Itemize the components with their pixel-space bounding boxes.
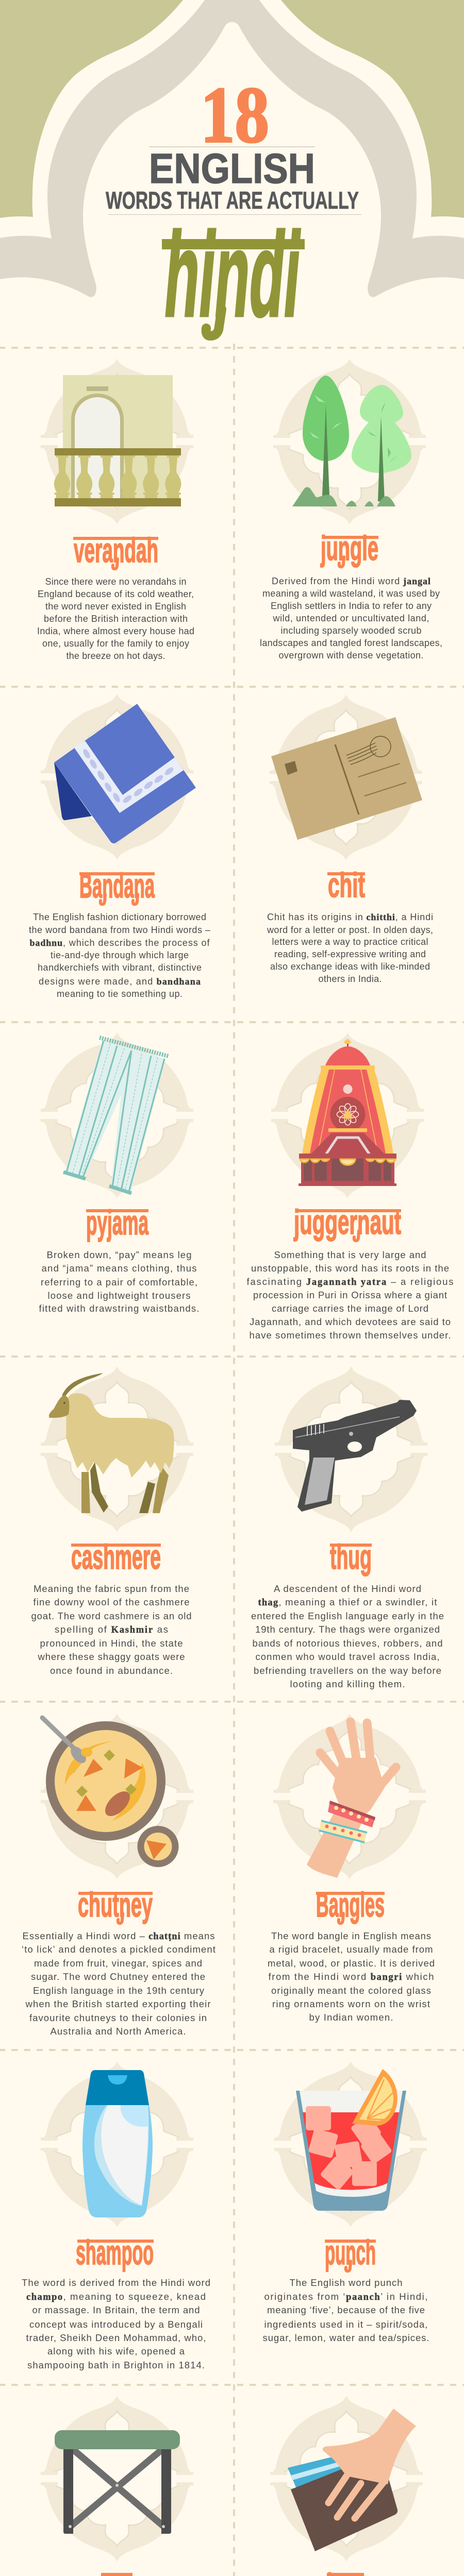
panel: shampoo bbox=[22, 2061, 210, 2370]
icon: bandana bbox=[54, 704, 196, 843]
text: verandah: before the British interaction with bbox=[44, 614, 188, 624]
heading: chutney bbox=[78, 1886, 153, 1924]
heading: cot bbox=[101, 2567, 132, 2576]
text: chutney: when the British started exporting their bbox=[25, 1998, 210, 2009]
text: juggernaut: carriage carries the image of Lord bbox=[272, 1303, 428, 1314]
title word hindi bbox=[160, 208, 306, 342]
text: bandana: meaning to tie something up. bbox=[57, 989, 183, 999]
panel: cashmere bbox=[31, 1366, 194, 1676]
text: pyjama: Broken down, “pay” means leg bbox=[46, 1249, 192, 1260]
text: cashmere: pronounced in Hindi, the state bbox=[40, 1638, 183, 1649]
heading: verandah bbox=[73, 531, 158, 570]
text: bandana: designs were made, and bandhana bbox=[39, 976, 201, 987]
icon: chutney bowl bbox=[42, 1718, 178, 1867]
icon: juggernaut chariot bbox=[299, 1039, 396, 1186]
text: bandana: the word bandana from two Hindi words – bbox=[29, 925, 210, 935]
text: jungle: meaning a wild wasteland, it was used by bbox=[262, 588, 440, 599]
text: thug: looting and killing them. bbox=[290, 1679, 405, 1689]
icon: cashmere goat bbox=[49, 1373, 174, 1513]
heading: chutney: chutney bbox=[78, 1886, 153, 1924]
text: shampoo: concept was introduced by a Bengali bbox=[29, 2319, 203, 2330]
text: pyjama: and “jama” means clothing, thus bbox=[41, 1263, 197, 1274]
heading: verandah: verandah bbox=[74, 531, 158, 570]
text: jungle: English settlers in India to refer to any bbox=[271, 601, 432, 611]
text: bandana: handkerchiefs with vibrant, distinctive bbox=[38, 962, 202, 973]
text: thug: conmen who would travel across India, bbox=[256, 1651, 439, 1662]
text: bangles: ring ornaments worn on the wrist bbox=[272, 1998, 430, 2009]
text: chit: others in India. bbox=[319, 974, 382, 984]
heading: shampoo bbox=[76, 2233, 154, 2272]
text: verandah: India, where almost every house had bbox=[37, 626, 194, 636]
text: punch: The English word punch bbox=[290, 2277, 402, 2288]
panel: chit bbox=[267, 694, 433, 984]
title: hindi bbox=[160, 208, 306, 342]
panel: cot bbox=[17, 2396, 217, 2576]
text: cashmere: once found in abundance. bbox=[50, 1665, 173, 1676]
text: cashmere bbox=[31, 1583, 192, 1676]
text: verandah: the breeze on hot days. bbox=[66, 651, 165, 661]
text: jungle: Derived from the Hindi word jangal bbox=[272, 576, 430, 586]
text: chit: reading, self-expressive writing and bbox=[274, 949, 426, 959]
icon: shampoo bottle bbox=[82, 2070, 153, 2217]
icon: pyjama trousers bbox=[63, 1038, 169, 1193]
panel: jungle bbox=[260, 359, 442, 660]
text: punch bbox=[263, 2277, 429, 2343]
panel: bangles bbox=[268, 1714, 435, 2023]
text: verandah: the word never existed in English bbox=[45, 601, 186, 612]
title line words that are actually: WORDS THAT ARE ACTUALLY bbox=[106, 187, 359, 214]
text: bandana: badhnu, which describes the process of bbox=[30, 938, 210, 948]
text: thug: A descendent of the Hindi word bbox=[274, 1583, 421, 1594]
heading: bangles: Bangles bbox=[316, 1886, 385, 1924]
panel: chutney bbox=[22, 1714, 216, 2037]
text: cashmere: spelling of Kashmir as bbox=[55, 1624, 168, 1635]
text: jungle: including sparsely wooded scrub bbox=[280, 625, 422, 636]
text: bandana bbox=[29, 912, 210, 999]
text: chutney: ‘to lick’ and denotes a pickled condiment bbox=[22, 1944, 216, 1955]
text: bangles: metal, wood, or plastic. It is derived bbox=[268, 1958, 435, 1969]
icon: hand taking from wallet bbox=[288, 2409, 416, 2551]
text: shampoo: shampooing bath in Brighton in 1814. bbox=[27, 2360, 205, 2370]
title bbox=[106, 71, 361, 342]
text: chutney: favourite chutneys to their colonies in bbox=[29, 2012, 207, 2023]
text: verandah: England because of its cold weather, bbox=[38, 589, 194, 599]
text: jungle: overgrown with dense vegetation. bbox=[278, 650, 424, 660]
text: bangles: The word bangle in English means bbox=[271, 1930, 431, 1941]
icon: postcard bbox=[271, 717, 422, 840]
text: shampoo: or massage. In Britain, the term and bbox=[32, 2304, 200, 2315]
heading: pyjama: pyjama bbox=[86, 1204, 148, 1242]
text: pyjama: referring to a pair of comfortable, bbox=[41, 1277, 197, 1287]
text: thug bbox=[251, 1583, 444, 1689]
heading: bandana bbox=[79, 867, 155, 905]
panel: pyjama bbox=[39, 1032, 199, 1314]
text: chit: Chit has its origins in chitthi, a Hindi bbox=[267, 912, 433, 922]
text: bangles bbox=[268, 1930, 435, 2023]
text: bangles: from the Hindi word bangri which bbox=[268, 1971, 434, 1982]
text: punch: sugar, lemon, water and tea/spices. bbox=[263, 2332, 429, 2343]
text: punch: originates from ‘paanch’ in Hindi, bbox=[264, 2291, 428, 2302]
text: shampoo: along with his wife, opened a bbox=[47, 2346, 185, 2357]
text: chutney bbox=[22, 1930, 216, 2037]
icon: cot bbox=[55, 2430, 180, 2534]
text: cashmere: fine downy wool of the cashmere bbox=[33, 1597, 190, 1607]
panel: loot bbox=[257, 2396, 443, 2576]
text: chutney: sugar. The word Chutney entered the bbox=[31, 1971, 205, 1982]
text: jungle: landscapes and tangled forest landscapes, bbox=[260, 638, 442, 648]
text: cashmere: where these shaggy goats were bbox=[37, 1651, 185, 1662]
text: bandana: tie-and-dye through which large bbox=[51, 950, 189, 960]
heading: jungle bbox=[320, 529, 378, 568]
text: pyjama bbox=[39, 1249, 199, 1314]
text: cashmere: goat. The word cashmere is an old bbox=[31, 1611, 192, 1621]
text: verandah bbox=[37, 577, 194, 661]
text: chit bbox=[267, 912, 433, 984]
panel: punch: punch bbox=[325, 2233, 376, 2272]
text: bangles: a rigid bracelet, usually made from bbox=[269, 1944, 433, 1955]
text: shampoo: trader, Sheikh Deen Mohammad, who, bbox=[26, 2332, 206, 2343]
text: chit: letters were a way to practice critical bbox=[272, 937, 428, 947]
text: bangles: by Indian women. bbox=[309, 2012, 393, 2023]
heading: thug bbox=[330, 1538, 372, 1577]
heading: bangles bbox=[316, 1886, 385, 1924]
text: verandah: one, usually for the family to enjoy bbox=[42, 638, 189, 649]
text: juggernaut: Something that is very large and bbox=[274, 1249, 426, 1260]
panel: thug bbox=[251, 1366, 444, 1689]
text: chit: also exchange ideas with like-minded bbox=[270, 961, 430, 972]
text: jungle bbox=[260, 576, 442, 660]
text: thug: befriending travellers on the way before bbox=[254, 1665, 441, 1676]
heading: shampoo: shampoo bbox=[76, 2233, 154, 2272]
heading: thug: thug bbox=[330, 1538, 372, 1577]
text: juggernaut: procession in Puri in Orissa where a giant bbox=[253, 1290, 447, 1300]
text: juggernaut: have sometimes thrown themselves under. bbox=[250, 1330, 451, 1341]
text: chit: word for a letter or post. In olden days, bbox=[267, 925, 433, 935]
heading: cashmere: cashmere bbox=[71, 1538, 161, 1577]
text: bandana: The English fashion dictionary borrowed bbox=[33, 912, 206, 922]
icon: verandah balcony bbox=[54, 375, 181, 506]
text: juggernaut: Jagannath, and which devotees are said to bbox=[250, 1316, 451, 1327]
heading: punch bbox=[325, 2233, 376, 2272]
text: cashmere: Meaning the fabric spun from the bbox=[34, 1583, 189, 1594]
text: thug: thag, meaning a thief or a swindler, it bbox=[258, 1597, 437, 1608]
text: shampoo bbox=[22, 2277, 210, 2370]
text: chutney: Essentially a Hindi word – chatṭni means bbox=[23, 1930, 214, 1942]
heading: cashmere bbox=[71, 1538, 161, 1577]
panel: bandana bbox=[29, 694, 210, 999]
text: juggernaut: unstoppable, this word has its roots in the bbox=[251, 1263, 449, 1274]
title number 18: 18 bbox=[201, 71, 269, 159]
panel: verandah bbox=[37, 359, 194, 661]
heading: loot bbox=[327, 2567, 364, 2576]
heading: chit: chit bbox=[328, 866, 365, 905]
text: thug: 19th century. The thags were organized bbox=[255, 1624, 440, 1635]
text: thug: entered the English language early in the bbox=[251, 1611, 444, 1621]
text: verandah: Since there were no verandahs in bbox=[45, 577, 187, 587]
header arch background bbox=[0, 0, 464, 297]
title word ENGLISH: ENGLISH bbox=[149, 145, 315, 192]
text: thug: bands of notorious thieves, robbers, and bbox=[253, 1638, 442, 1649]
icon: jungle trees bbox=[292, 376, 411, 506]
text: chutney: made from fruit, vinegar, spices and bbox=[34, 1958, 202, 1969]
text: chutney: Australia and North America. bbox=[51, 2026, 186, 2037]
heading: bandana: Bandana bbox=[79, 867, 155, 905]
text: pyjama: fitted with drawstring waistbands. bbox=[39, 1303, 199, 1314]
text: bangles: originally meant the colored glass bbox=[271, 1985, 431, 1996]
text: shampoo: The word is derived from the Hindi word bbox=[22, 2277, 210, 2288]
text: punch: ingredients used in it – spirit/soda, bbox=[264, 2319, 428, 2330]
icon: pistol bbox=[293, 1400, 417, 1512]
text: punch: meaning ‘five’, because of the five bbox=[267, 2304, 425, 2315]
heading: pyjama bbox=[86, 1204, 148, 1242]
icon: punch glass bbox=[296, 2069, 406, 2211]
heading: jungle: jungle bbox=[320, 529, 378, 568]
text: jungle: wild, untended or uncultivated land, bbox=[272, 613, 429, 623]
icon: hand with bangles bbox=[307, 1722, 396, 1878]
text: pyjama: loose and lightweight trousers bbox=[47, 1290, 191, 1301]
panel: juggernaut bbox=[246, 1032, 454, 1341]
heading: chit bbox=[327, 866, 365, 905]
text: juggernaut: fascinating Jagannath yatra – a religious bbox=[246, 1276, 454, 1287]
panel: punch bbox=[263, 2061, 429, 2343]
text: chutney: English language in the 19th century bbox=[33, 1985, 205, 1996]
text: juggernaut bbox=[246, 1249, 454, 1341]
text: shampoo: champo, meaning to squeeze, knead bbox=[26, 2291, 206, 2302]
heading: juggernaut bbox=[293, 1203, 401, 1242]
